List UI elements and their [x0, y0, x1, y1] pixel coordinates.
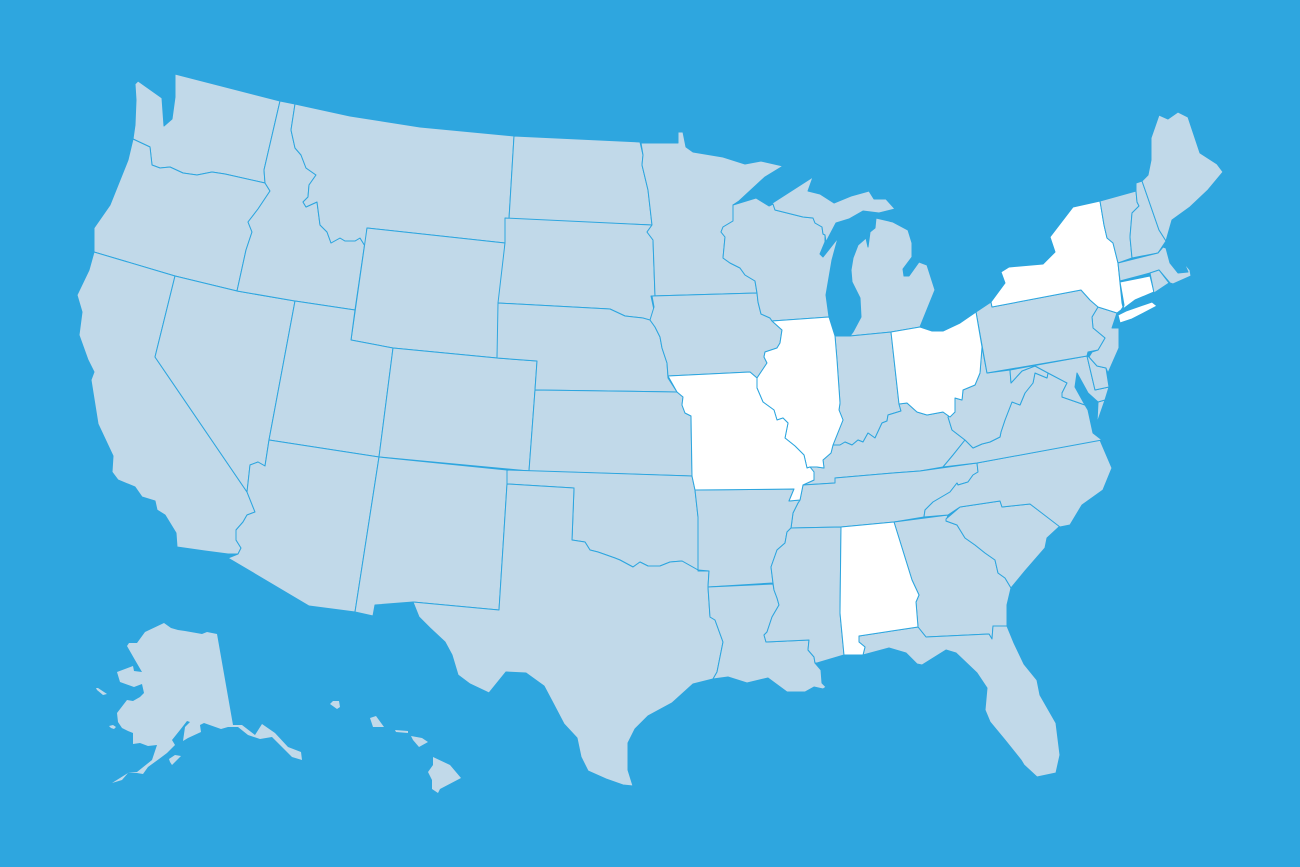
state: Iowa	[650, 293, 782, 378]
state: Illinois	[757, 317, 843, 468]
state: Maine	[1142, 112, 1223, 241]
state: Pennsylvania	[976, 290, 1105, 373]
state: Missouri	[668, 372, 814, 501]
inset: Alaska	[96, 623, 302, 783]
state: Nebraska	[497, 303, 677, 392]
state: Utah	[269, 301, 393, 457]
Virginia eastern shore	[1097, 400, 1105, 423]
Alaska islands	[96, 688, 181, 765]
Maui	[411, 736, 428, 747]
state: Oregon	[94, 139, 270, 291]
Nunivak Island	[109, 725, 116, 729]
state: Texas	[413, 484, 723, 786]
New York mainland	[991, 201, 1123, 313]
Michigan lower peninsula	[850, 218, 935, 336]
Virginia mainland	[943, 373, 1102, 467]
state: Minnesota	[641, 132, 783, 296]
state: Colorado	[379, 348, 537, 471]
state: Oklahoma	[507, 470, 698, 570]
state: North Carolina	[924, 440, 1112, 527]
state: Indiana	[833, 332, 901, 445]
state: South Dakota	[498, 218, 655, 322]
state: Arizona	[228, 440, 379, 612]
inset: Hawaii	[330, 701, 461, 793]
state: Rhode Island	[1150, 270, 1169, 293]
state: Idaho	[237, 101, 367, 310]
state: Florida	[859, 626, 1060, 777]
state: Arkansas	[695, 489, 800, 587]
Kodiak Island	[169, 755, 181, 765]
state: Kentucky	[803, 403, 965, 485]
Molokai	[395, 730, 408, 733]
state: South Carolina	[946, 501, 1060, 588]
state: Connecticut	[1120, 276, 1154, 309]
state: Tennessee	[791, 463, 978, 528]
state: New Jersey	[1089, 307, 1119, 373]
state: Michigan	[771, 177, 935, 336]
state: Delaware	[1087, 356, 1109, 390]
state: Montana	[291, 104, 514, 246]
state: Mississippi	[764, 527, 844, 663]
state: Louisiana	[708, 584, 826, 692]
Kauai	[330, 701, 340, 709]
St. Lawrence Island	[96, 688, 107, 695]
state: Massachusetts	[1118, 247, 1191, 284]
Long Island	[1118, 302, 1157, 323]
state: Vermont	[1100, 191, 1139, 263]
Michigan upper peninsula	[771, 177, 895, 242]
state: Ohio	[891, 312, 982, 417]
state: California	[77, 252, 255, 554]
state: North Dakota	[509, 136, 652, 225]
state: New York	[991, 201, 1157, 323]
Alaska mainland	[112, 623, 302, 783]
state: New Hampshire	[1130, 181, 1166, 258]
state: Alabama	[840, 522, 919, 655]
state: Maryland	[1010, 356, 1109, 405]
state: New Mexico	[355, 457, 507, 616]
state: Georgia	[894, 515, 1011, 639]
state: Virginia	[943, 373, 1105, 467]
Big Island	[428, 757, 461, 793]
state: Nevada	[155, 276, 295, 492]
state: Washington	[133, 74, 280, 183]
state: Wisconsin	[721, 198, 838, 321]
Oahu	[370, 716, 384, 727]
state: West Virginia	[948, 347, 1048, 448]
state: Wyoming	[351, 228, 505, 358]
state: Kansas	[529, 390, 692, 476]
